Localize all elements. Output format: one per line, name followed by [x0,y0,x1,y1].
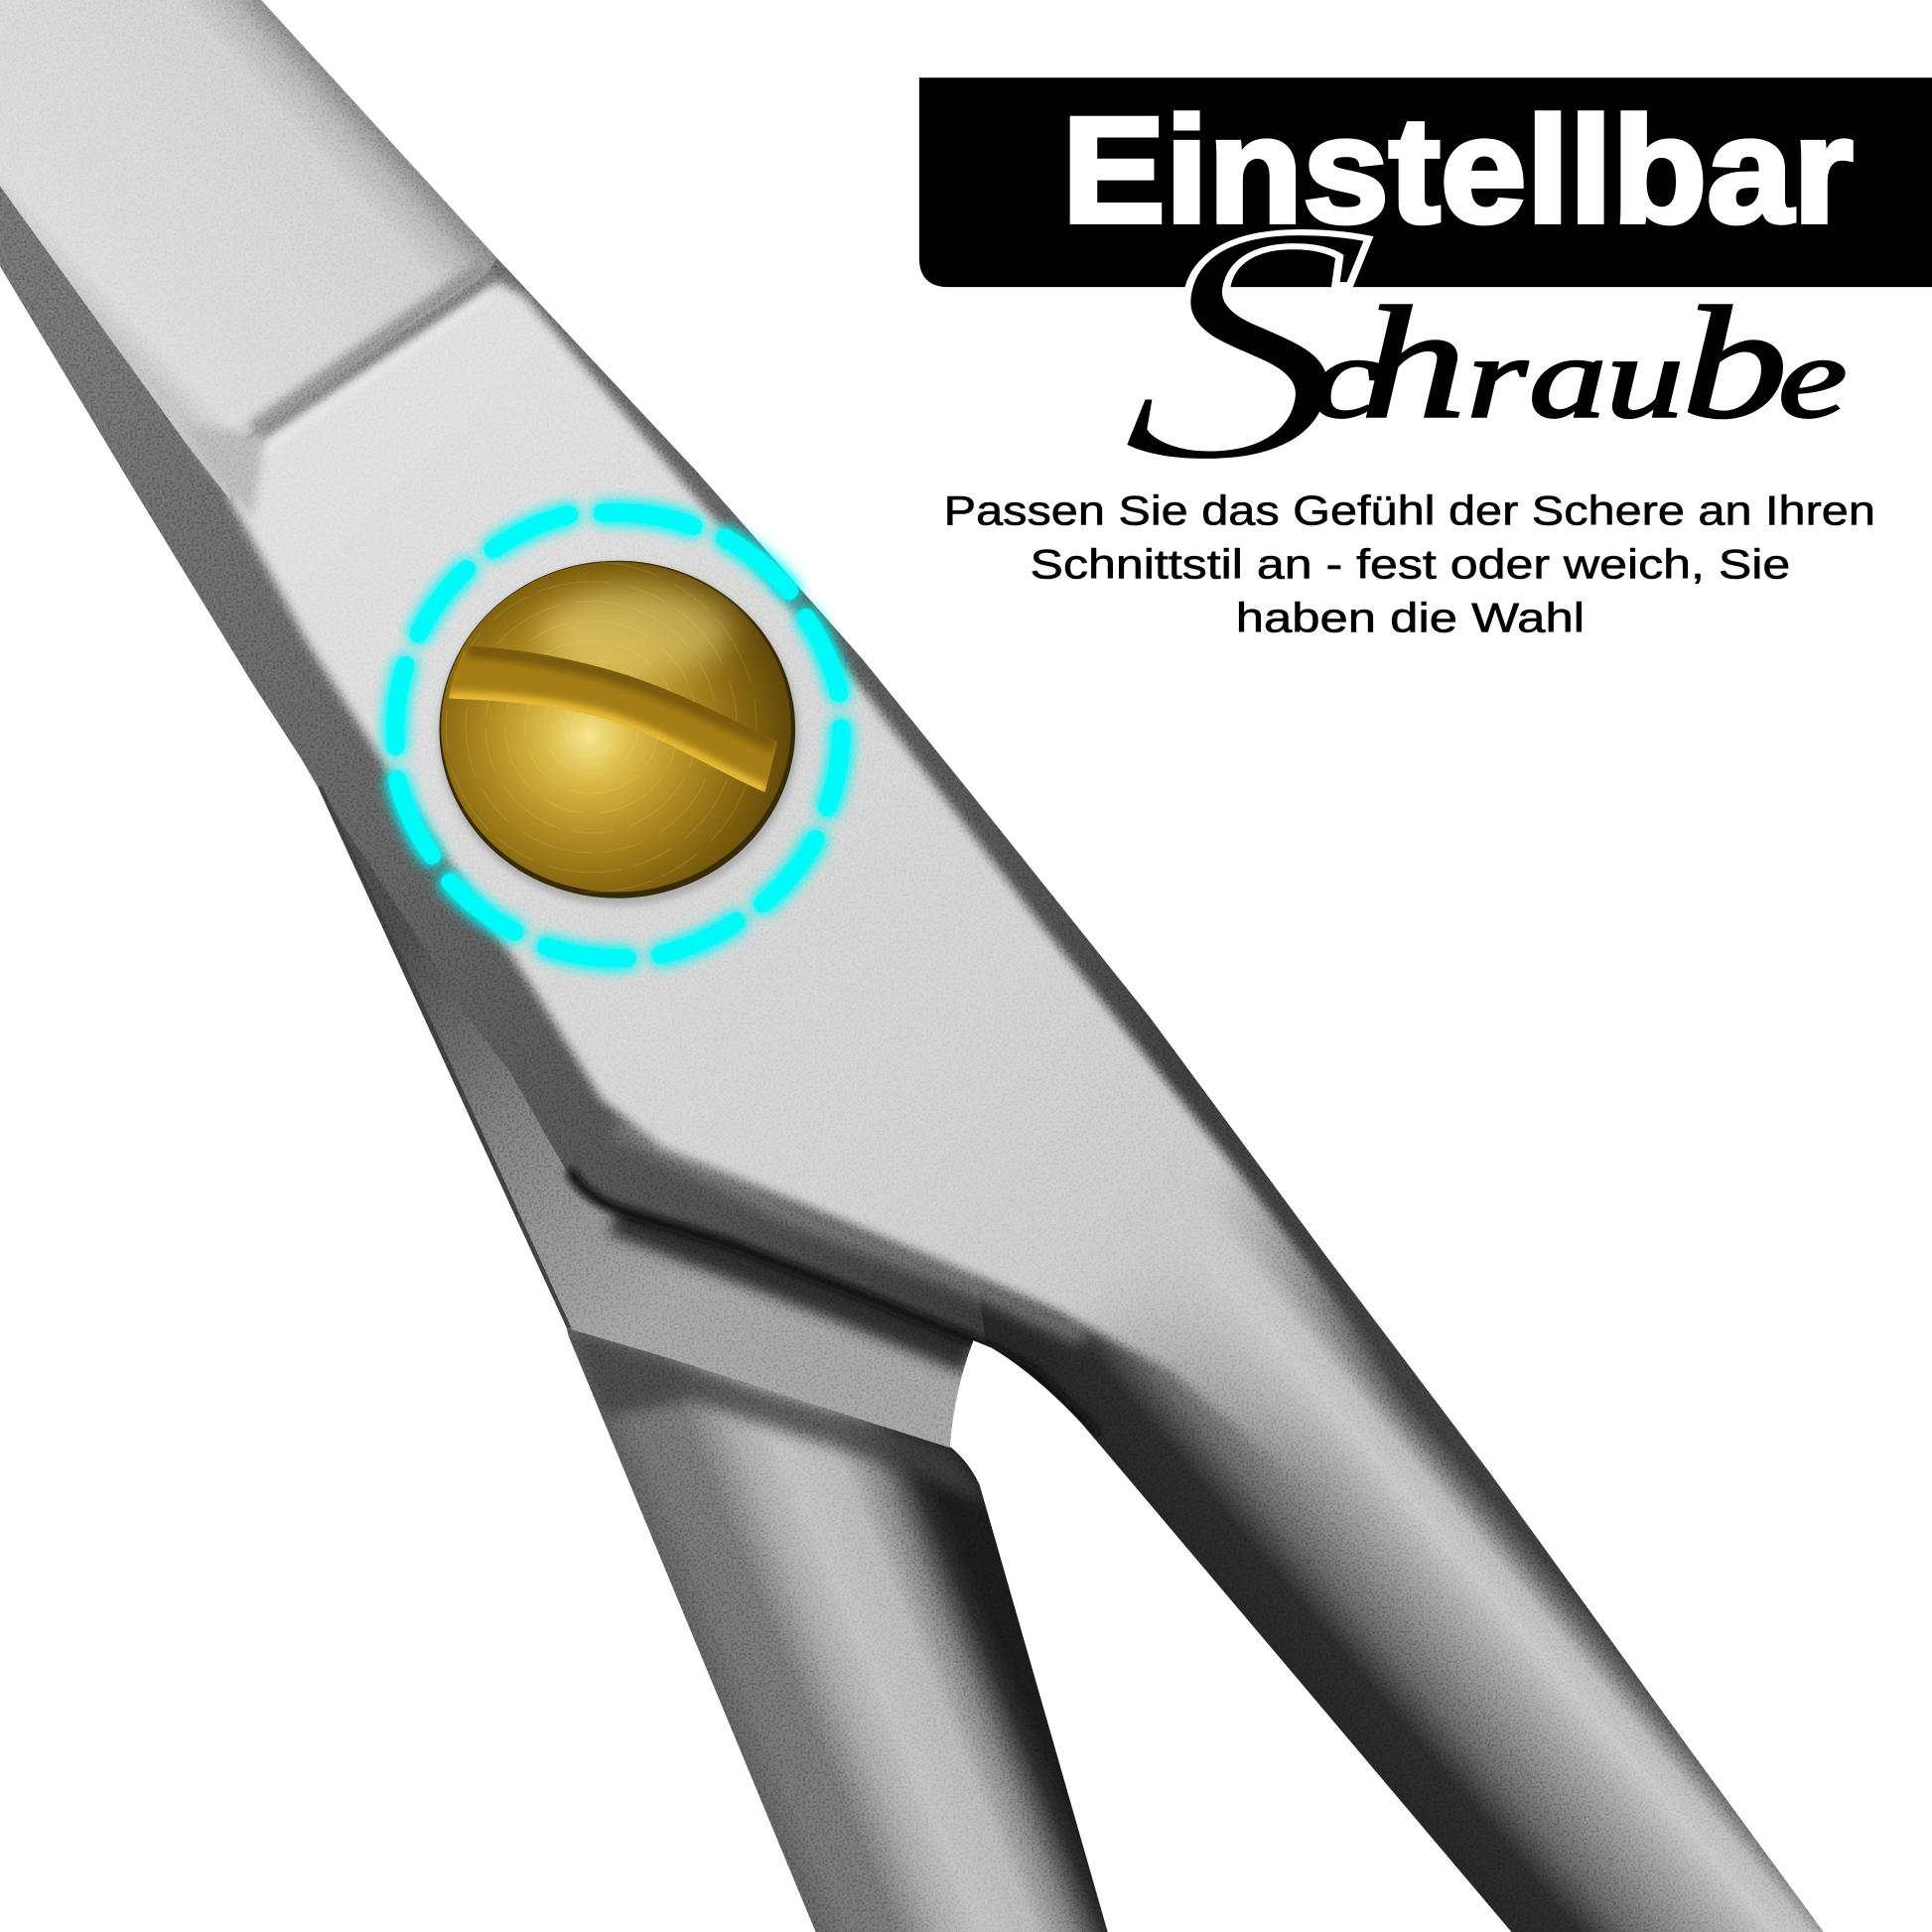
slot dark upper wall [467,645,777,742]
slot floor [449,645,777,792]
bevel dark lower edge [569,1171,1097,1436]
pivot tang [318,787,980,1448]
description text: haben die Wahl [1236,595,1585,641]
slot bright lower lip [449,699,765,792]
script remainder: h [1360,275,1466,452]
heading banner [919,77,1932,287]
description text: Schnittstil an - fest oder weich, Sie [1031,541,1790,588]
groove corner blend [185,425,265,517]
dark bevel band lower [465,1009,985,1340]
lower arm top shadow [571,1329,998,1509]
right edge strip [369,252,1380,1355]
script remainder: r [1466,313,1528,443]
screw [426,561,801,905]
script remainder: b [1682,275,1788,452]
screw shadow [439,563,798,905]
script remainder: c [1311,313,1380,443]
dashed adjustment ring [395,512,841,958]
upper body base with dark bevel [0,0,1202,1424]
description text: Passen Sie das Gefühl der Schere an Ihren [944,487,1875,534]
heading: Einstellbar: Einstellbar [1062,86,1854,254]
screw head [441,562,791,893]
groove highlight [261,293,492,454]
upper highlight [540,587,732,675]
script heading: Schraube [1102,155,1848,532]
screw slot [449,645,777,792]
description text [944,487,1875,641]
script remainder: e [1778,313,1848,443]
plate flat surface [222,276,1390,1459]
script capital S: S [1102,155,1391,532]
screw rim [439,561,795,898]
top flat surface [0,0,496,500]
script remainder: a [1529,313,1606,443]
brushed marks [426,562,757,893]
tang top shadow [617,1213,973,1355]
bevel soft highlight [617,1128,1084,1337]
tang outer edge [318,787,567,1328]
groove shadow [252,266,486,431]
long arm [978,1160,1824,1932]
lower arm [561,1325,1171,1932]
script remainder: u [1606,313,1684,443]
